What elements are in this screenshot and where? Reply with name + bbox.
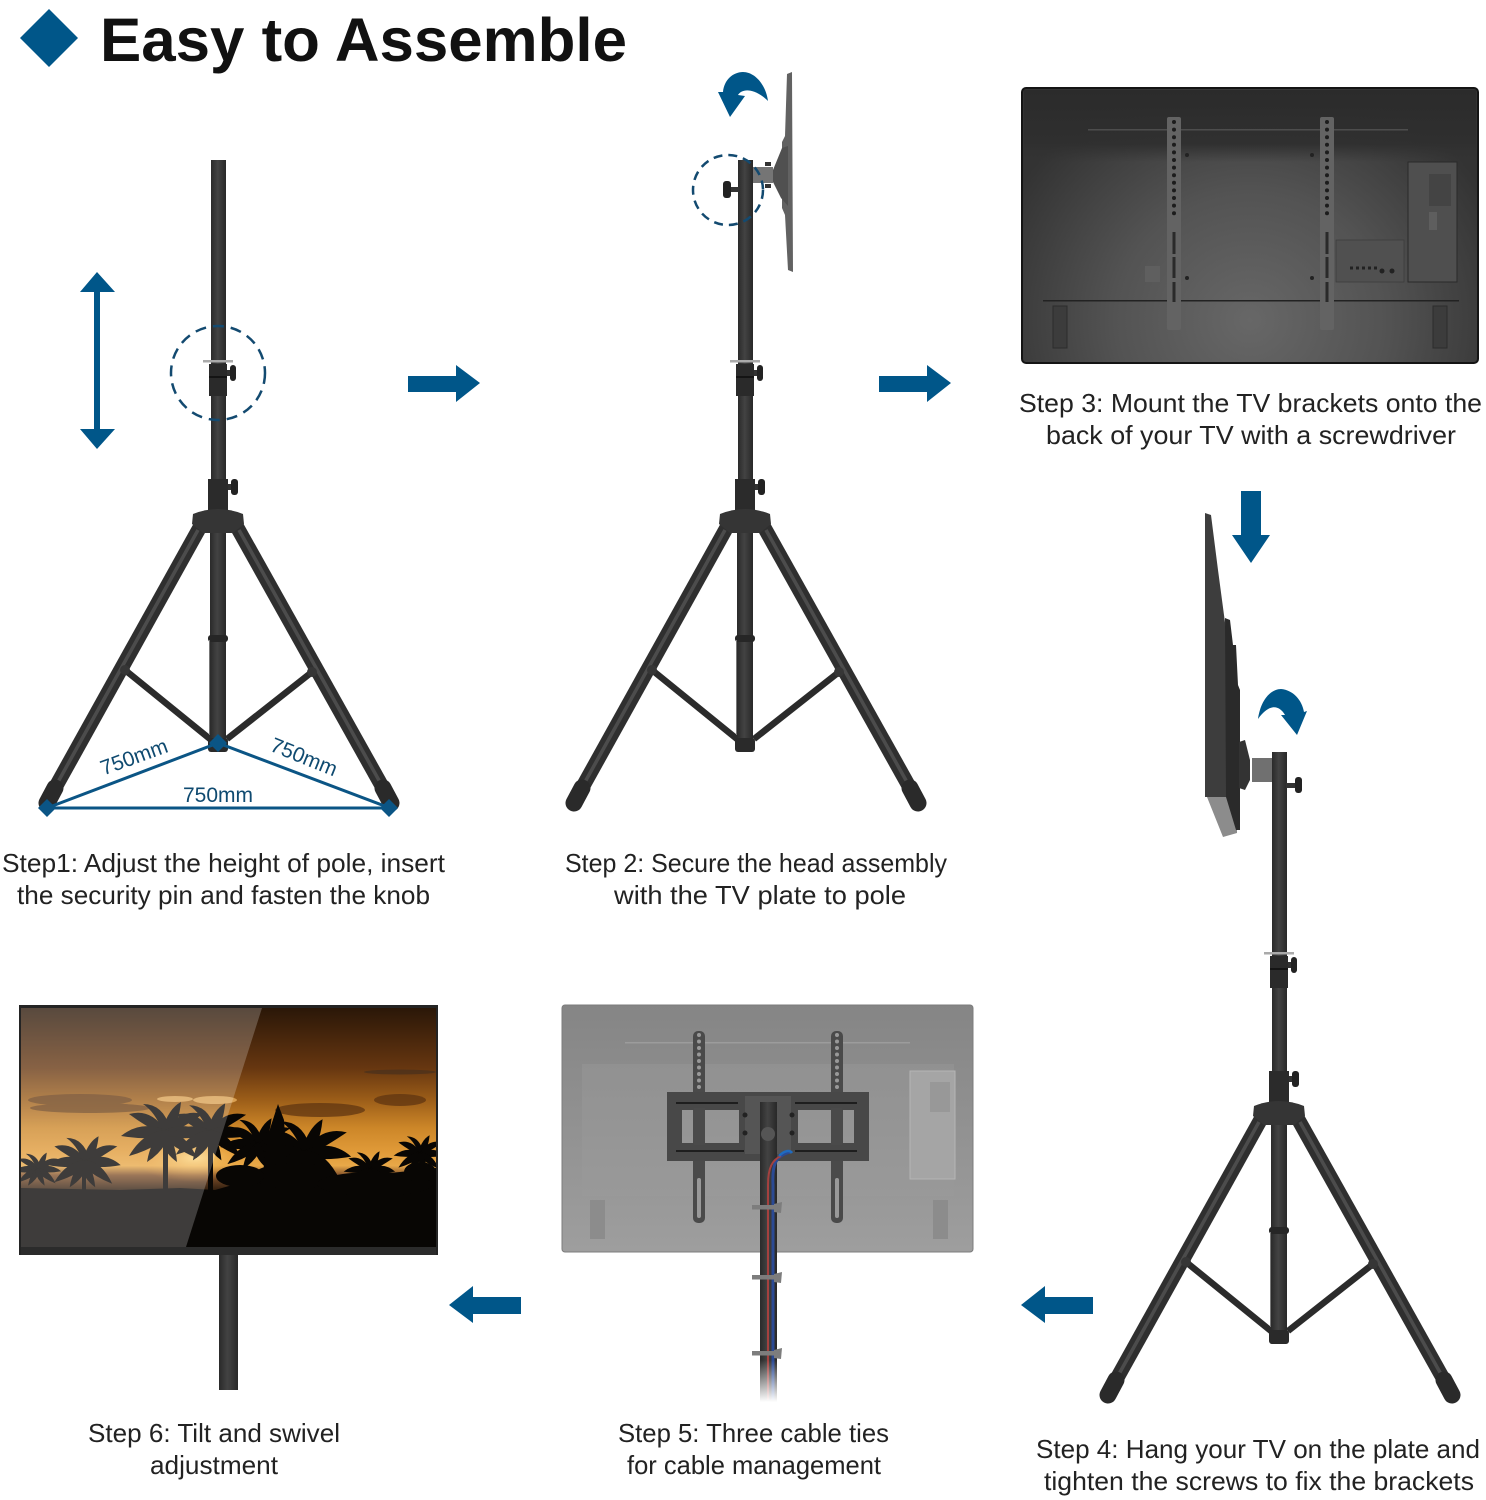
arrow: step 2 to 3: [879, 365, 951, 402]
step 1 caption: the security pin and fasten the knob: [17, 880, 430, 910]
curved arrow step 4: [1258, 689, 1307, 735]
step 4 caption: [1036, 1434, 1480, 1496]
panel: step 6 TV on pole with sunset: [14, 1005, 445, 1390]
arrow: step 4 to 5: [1021, 1286, 1093, 1323]
dimension label right: 750mm: [267, 734, 341, 781]
curved arrow step 2: [718, 72, 768, 117]
arrow: step 1 to 2: [408, 365, 480, 402]
ground silhouette: [21, 1168, 436, 1220]
knob step 4: [1286, 777, 1302, 793]
step 5 caption: Step 5: Three cable ties: [618, 1418, 889, 1448]
dimension label left: 750mm: [97, 735, 171, 780]
step 4 caption: tighten the screws to fix the brackets: [1044, 1466, 1474, 1496]
step 6 caption: [88, 1418, 340, 1480]
stand pole: [219, 1254, 238, 1390]
arrow: vertical double height adjust: [80, 272, 115, 449]
step 3 caption: [1019, 388, 1482, 450]
TV side profile: [1205, 513, 1272, 837]
arrow: step 5 to 6: [449, 1286, 521, 1323]
step 6 caption: adjustment: [150, 1450, 279, 1480]
step 5 caption: [618, 1418, 889, 1480]
step 4 caption: Step 4: Hang your TV on the plate and: [1036, 1434, 1480, 1464]
arrow: step 3 to 4: [1232, 491, 1270, 563]
step 2 caption: Step 2: Secure the head assembly: [565, 848, 947, 878]
screen sunset: [14, 1008, 445, 1247]
TV frame: [19, 1005, 438, 1255]
left bracket: [1167, 117, 1181, 330]
panel: step 2 tripod with head: [574, 72, 918, 803]
step 5 caption: for cable management: [627, 1450, 882, 1480]
cable ties: [752, 1202, 782, 1359]
dimension label bottom: 750mm: [183, 784, 253, 807]
step 1 caption: Step1: Adjust the height of pole, insert: [2, 848, 446, 878]
vertical brackets: [693, 1031, 843, 1223]
pole with cables: [760, 1102, 792, 1402]
step 1 caption: [2, 848, 446, 910]
title: Easy to Assemble: [100, 6, 627, 74]
step 2 caption: with the TV plate to pole: [613, 880, 906, 910]
step 3 caption: back of your TV with a screwdriver: [1046, 420, 1456, 450]
step 3 caption: Step 3: Mount the TV brackets onto the: [1019, 388, 1482, 418]
panel: step 1 tripod: [38, 160, 398, 817]
right bracket: [1320, 117, 1334, 330]
panel: step 3 TV back with brackets: [1022, 88, 1478, 363]
TV plate side view: [753, 72, 793, 272]
knob: [723, 181, 739, 198]
service panel: [1408, 162, 1457, 282]
panel: step 5 TV back with cable ties: [562, 1005, 973, 1402]
panel: step 4 tripod with TV side view: [1108, 513, 1452, 1395]
dashed detail circle step 1: [171, 326, 265, 420]
step 6 caption: Step 6: Tilt and swivel: [88, 1418, 340, 1448]
glass reflection: [21, 1008, 262, 1247]
dimension triangle: [38, 734, 398, 817]
step 2 caption: [565, 848, 947, 910]
mount plate: [667, 1092, 869, 1161]
title icon: blue diamond: [20, 9, 78, 67]
dashed detail circle step 2: [693, 155, 763, 225]
